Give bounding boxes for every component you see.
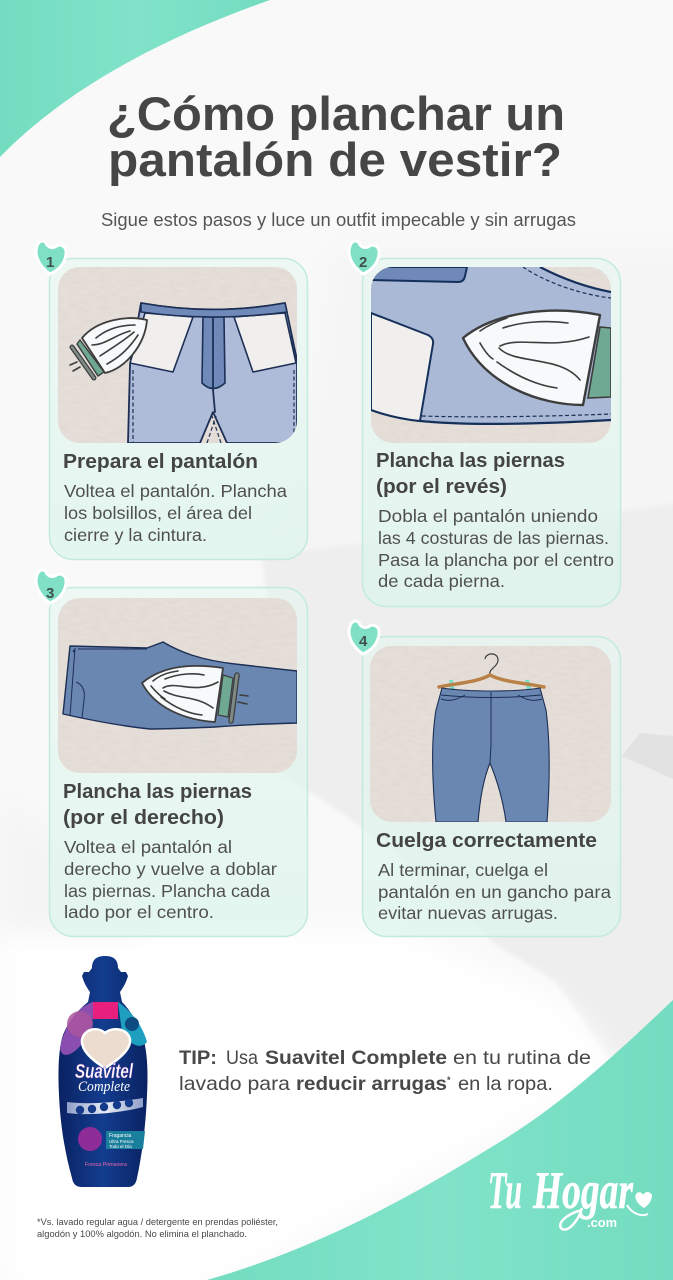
card 3 background [50, 588, 308, 936]
panel: step 1 [36, 241, 307, 560]
product bottle: Suavitel Complete: Fragancia [109, 1133, 131, 1139]
tip text: en la ropa. [458, 1073, 553, 1095]
heading 3: (por el derecho) [63, 807, 224, 829]
title: ¿Cómo planchar un [107, 87, 565, 140]
bottle brand: Suavitel [75, 1061, 133, 1083]
badge 3 [36, 570, 66, 603]
heading 1: Prepara el pantalón [63, 451, 258, 473]
body 1: Voltea el pantalón. Plancha [64, 481, 287, 501]
footnote: algodón y 100% algodón. No elimina el planchado. [37, 1229, 247, 1240]
title [107, 87, 565, 186]
bottle band [67, 1098, 143, 1114]
top-left mint curve [0, 0, 270, 157]
panel: step 3 [36, 570, 307, 936]
bottle pink tag [93, 1002, 118, 1019]
illustration: iron on trouser waist [58, 267, 297, 443]
body 3: lado por el centro. [64, 902, 214, 922]
bottom-right mint curve [207, 1000, 673, 1280]
logo: Tu Hogar.com: .com [587, 1215, 617, 1230]
title: pantalón de vestir? [108, 133, 562, 186]
panel: step 4 [349, 621, 620, 936]
logo: Tu Hogar.com: Tu [488, 1162, 522, 1220]
body 1: los bolsillos, el área del [64, 503, 252, 523]
body 2: Dobla el pantalón uniendo [378, 506, 598, 526]
badge 1 [36, 241, 66, 274]
body 3: derecho y vuelve a doblar [64, 859, 277, 879]
illustration: iron on inside-out leg [371, 267, 611, 443]
badge 1: 1 [46, 254, 54, 271]
card 2 background [362, 258, 620, 606]
logo: Tu Hogar.com [488, 1162, 652, 1230]
tip text: reducir arrugas [296, 1073, 447, 1095]
heading 2: (por el revés) [376, 476, 507, 498]
body 3 [64, 837, 277, 922]
bottle flowers [60, 1002, 147, 1055]
badge 2 [349, 241, 379, 274]
tip text: Usa [226, 1047, 258, 1069]
logo: Tu Hogar.com: Hogar [532, 1162, 634, 1220]
panel: step 2 [349, 241, 620, 607]
footnote: *Vs. lavado regular agua / detergente en prendas poliéster, [37, 1217, 278, 1228]
footnote [37, 1217, 278, 1240]
body 2 [378, 506, 614, 591]
product bottle: Suavitel Complete: Todo el Día [109, 1144, 132, 1149]
product bottle: Suavitel Complete [58, 956, 147, 1187]
card 1 background [50, 258, 308, 560]
heading 3: Plancha las piernas [63, 781, 252, 803]
badge 2: 2 [359, 254, 367, 271]
body 3: Voltea el pantalón al [64, 837, 232, 857]
bottle fragrance [106, 1131, 145, 1149]
badge 3: 3 [46, 585, 54, 602]
body 4: pantalón en un gancho para [378, 882, 611, 902]
tip text: en tu rutina de [453, 1047, 591, 1069]
bottle variant: Complete [78, 1079, 130, 1095]
product bottle: Suavitel Complete: Fresca Primavera [85, 1162, 127, 1168]
body 2: Pasa la plancha por el centro [378, 550, 614, 570]
tip text: * [447, 1075, 451, 1085]
tip text: TIP: [179, 1047, 217, 1069]
heading 2 [376, 450, 565, 498]
body 2: las 4 costuras de las piernas. [378, 528, 609, 548]
card 4 background [362, 636, 620, 936]
bottle heart label [82, 1029, 130, 1068]
badge 4 [349, 621, 379, 654]
body 4 [378, 860, 611, 923]
illustration: iron on folded trousers [58, 598, 297, 773]
tip text: Suavitel Complete [265, 1047, 447, 1069]
heading 4: Cuelga correctamente [376, 830, 597, 852]
tip text [179, 1047, 591, 1095]
body 1: cierre y la cintura. [64, 525, 207, 545]
body 4: Al terminar, cuelga el [378, 860, 548, 880]
body 1 [64, 481, 287, 545]
tip text: lavado para [179, 1073, 290, 1095]
illustration: trousers on hanger [370, 646, 611, 822]
badge 4: 4 [359, 633, 368, 650]
product bottle: Suavitel Complete: Ultra Fresca [109, 1139, 134, 1144]
body 3: las piernas. Plancha cada [64, 881, 270, 901]
body 2: de cada pierna. [378, 571, 505, 591]
body 4: evitar nuevas arrugas. [378, 903, 558, 923]
heading 3 [63, 781, 252, 829]
subtitle: Sigue estos pasos y luce un outfit impecable y sin arrugas [101, 209, 576, 230]
heading 2: Plancha las piernas [376, 450, 565, 472]
